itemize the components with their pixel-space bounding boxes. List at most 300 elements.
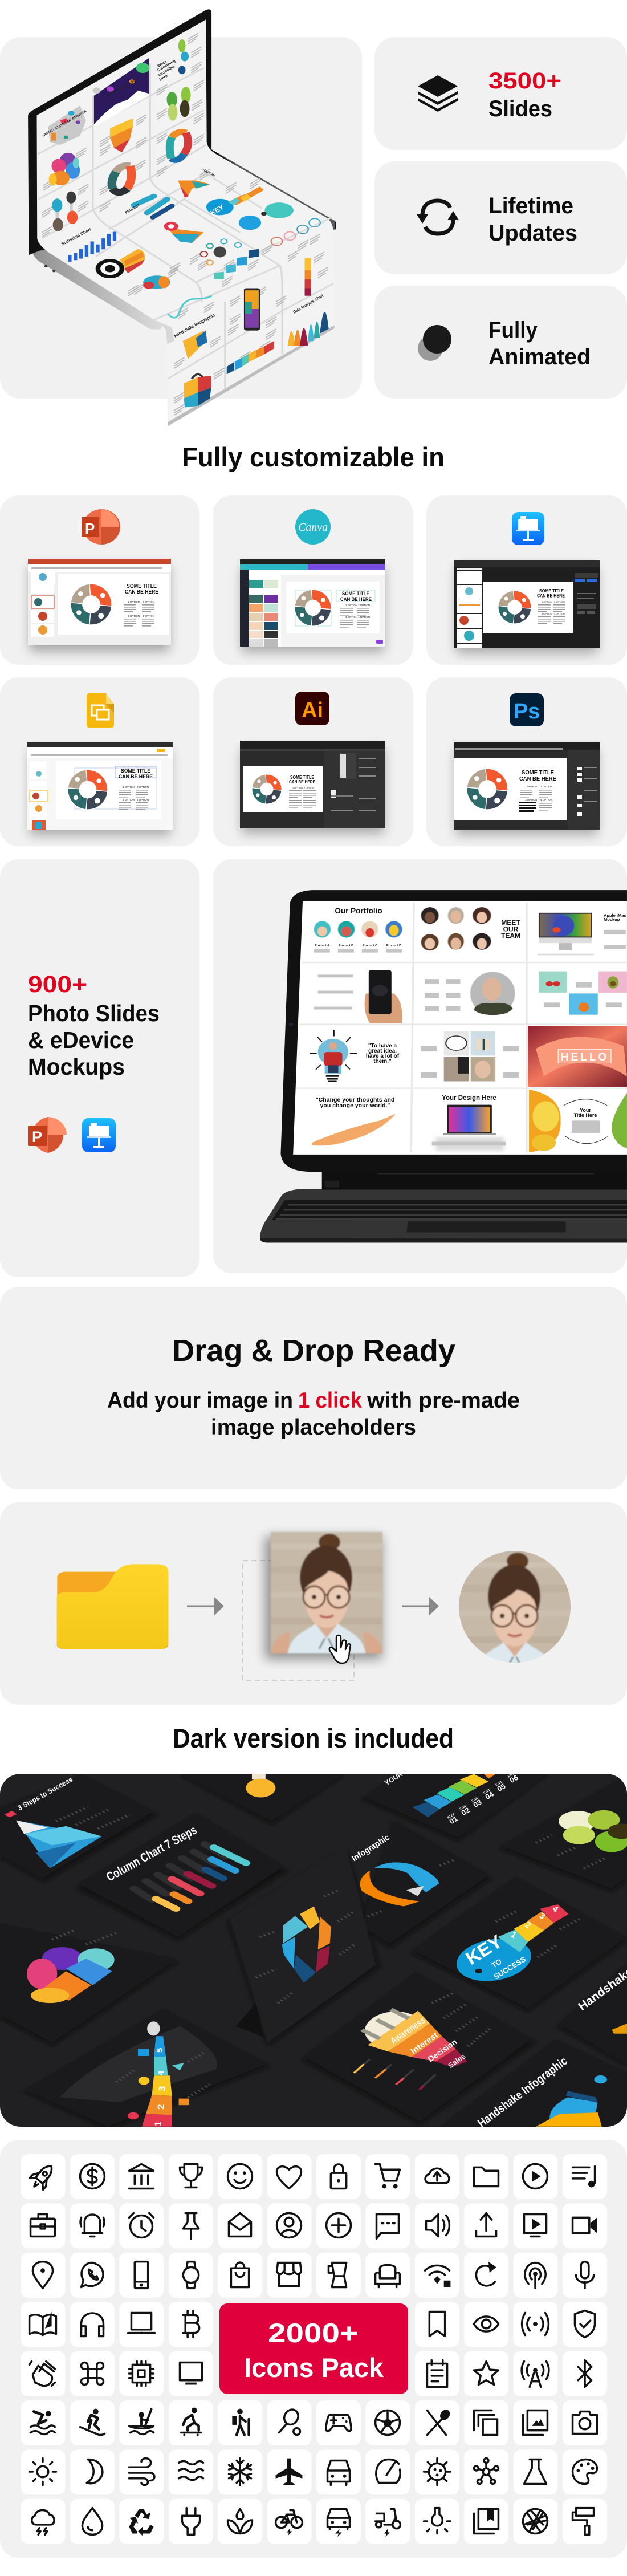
dark slide headings: 5 (155, 2048, 165, 2053)
panel: tablet mockup (213, 859, 627, 1273)
icon: waves (179, 2461, 203, 2480)
icon: camera (573, 2412, 597, 2433)
lightbulb circle (246, 1774, 275, 1797)
tablet slide texts: TEAM (501, 932, 520, 940)
network head (200, 239, 241, 265)
icon: command (81, 2363, 104, 2384)
icon: store (277, 2263, 301, 2286)
screenshot: Canva window: 1 OPTION (345, 604, 357, 607)
icon: armchair (376, 2265, 400, 2287)
icon: lock (331, 2164, 347, 2188)
blue column chart (68, 232, 116, 262)
callout: 2000+ icons pack: Icons Pack (244, 2352, 384, 2383)
icon: Keynote (82, 1118, 116, 1152)
triangle pyramid (4, 1811, 102, 1868)
card: lifetime updates (374, 161, 627, 274)
panel: dark version slides (0, 1766, 627, 2130)
screenshot: Keynote window: 3 OPTION (542, 612, 552, 615)
icon: cloud upload (425, 2168, 449, 2183)
screenshot: Illustrator window (240, 741, 385, 834)
dark slide headings: Sales (446, 2052, 467, 2070)
screenshot: Photoshop window: CAN BE HERE (519, 776, 556, 782)
text: Lifetime Updates: Lifetime (488, 193, 573, 218)
text: add your image: image placeholders (211, 1415, 416, 1440)
screenshot: Canva window: 3 OPTION (345, 616, 357, 619)
dark slide headings: STEP (459, 1804, 467, 1811)
icon: water drop (82, 2508, 103, 2534)
arrow (187, 1597, 224, 1615)
screenshot: Keynote window: 1 OPTION (542, 600, 552, 603)
icon: Photoshop: Ps (514, 700, 540, 724)
screenshot: Illustrator window: 1 OPTION (292, 787, 303, 789)
icon: skateboarder (181, 2408, 201, 2436)
screenshot: PowerPoint window (28, 559, 171, 651)
screenshot: PowerPoint window: 3 OPTION (128, 615, 140, 617)
card: Canva (213, 495, 413, 665)
screenshot: Google Slides window: SOME TITLE (121, 768, 150, 774)
heading: fully customizable in: Fully customizable in (182, 442, 445, 472)
icon: animated dot (418, 325, 451, 361)
icon: aperture (523, 2509, 547, 2533)
tablet slide texts: Our Portfolio (335, 907, 382, 915)
screenshot: PowerPoint window: CAN BE HERE (125, 589, 158, 595)
dark slide headings: STEP (483, 1788, 491, 1795)
tablet with keyboard illustration (260, 890, 627, 1243)
screenshot: Photoshop window (454, 742, 600, 835)
dark slide headings: Handshake Infographic (475, 2054, 570, 2130)
icon: skier (80, 2409, 104, 2435)
iMac mockup (538, 913, 594, 955)
icon: monitor (180, 2363, 202, 2384)
icon: headphones (81, 2313, 104, 2336)
icon: network (474, 2459, 498, 2484)
text: Lifetime Updates (488, 193, 577, 246)
slide heading texts on sheet: Statistical Chart (60, 226, 92, 247)
icon: lotus (228, 2509, 252, 2533)
icon: bell (80, 2215, 104, 2236)
arrow (402, 1597, 439, 1615)
screenshot: Keynote window (454, 560, 600, 653)
text: 3500+ Slides: 3500+ (488, 68, 561, 94)
dark slide headings: STEP (495, 1780, 503, 1787)
icon: images (523, 2411, 547, 2435)
tablet slide texts (315, 907, 626, 1118)
slide heading texts on sheet: UNITED STATES OF AMERICA (42, 109, 88, 138)
heading: drag and drop: Drag & Drop Ready (172, 1334, 455, 1368)
icon: wifi lock (425, 2265, 450, 2287)
icon: user circle (277, 2213, 301, 2237)
card: Keynote (426, 495, 627, 665)
icon: map pin (32, 2262, 53, 2288)
dark slide headings: 3 (538, 1911, 547, 1921)
data analysis chart (288, 312, 329, 346)
rocket road (142, 2021, 172, 2127)
dark ring (112, 166, 132, 192)
icon: electric bike (276, 2510, 302, 2536)
icon: podcast (525, 2263, 545, 2288)
icon: light bulb (424, 2508, 450, 2533)
dark slide headings: 06 (508, 1773, 520, 1785)
US map slide (48, 105, 86, 145)
text: 900+ Photo Slides & eDevice Mockups: Mockups (28, 1054, 125, 1080)
laptop mockup (436, 1105, 504, 1151)
head infographic (360, 1862, 439, 1907)
brain infographic (143, 275, 170, 289)
icon: copy (474, 2411, 497, 2435)
tablet slide texts: Your Design Here (442, 1095, 496, 1102)
icon: speaker (426, 2215, 449, 2236)
card: 900+ photo slides (0, 859, 199, 1277)
vertical tag column (305, 258, 311, 296)
progress circles (271, 218, 320, 246)
panel: icons pack (0, 2140, 627, 2558)
tablet slide texts: "Change your thoughts and (316, 1096, 394, 1103)
card: drag and drop ready (0, 1287, 627, 1489)
handshake infographic (183, 331, 207, 359)
text: Fully Animated (488, 318, 591, 369)
icon: electric car (327, 2509, 350, 2537)
icon: trophy (180, 2164, 202, 2187)
phone in hand (365, 970, 402, 1023)
screenshot: PowerPoint window: 2 OPTION (142, 600, 154, 603)
tablet slide texts: have a lot of (366, 1053, 400, 1059)
icon: folder (57, 1564, 168, 1649)
icon: bank (129, 2164, 153, 2188)
screenshot: Google Slides window: CAN BE HERE (119, 774, 153, 780)
image placeholders (444, 1031, 495, 1081)
card: fully animated (374, 286, 627, 399)
dark slide headings: 2 (523, 1920, 532, 1931)
icon: PowerPoint (82, 509, 120, 545)
icon: storm cloud (32, 2510, 54, 2534)
icon: layers (418, 75, 458, 112)
card: 3500+ slides (374, 37, 627, 150)
dark slide headings: 02 (459, 1806, 471, 1817)
fruit tiles (539, 972, 627, 1015)
dark slide headings: 2 (156, 2104, 166, 2110)
icon: PowerPoint: P (32, 1128, 42, 1145)
photo being dragged (265, 1532, 382, 1659)
slide heading texts on sheet: Data Analysis Chart (292, 293, 324, 315)
icon: heart (277, 2167, 301, 2188)
screenshot: PowerPoint window: 1 OPTION (128, 600, 140, 603)
screenshot: PowerPoint window: 4 OPTION (142, 615, 154, 617)
screenshot: Canva window: 2 OPTION (358, 604, 370, 607)
icon: open envelope (229, 2213, 251, 2236)
fruit slide (529, 1090, 627, 1152)
icon: Canva (295, 509, 331, 545)
tablet slide texts: you change your world." (320, 1102, 390, 1109)
icon: bookmarks (474, 2509, 498, 2533)
icon: bitcoin (183, 2311, 199, 2337)
heads infographic (239, 202, 294, 230)
key infographic (206, 186, 264, 215)
text: add your image: 1 click (298, 1388, 362, 1413)
clover petals (559, 1810, 627, 1852)
funnel infographic (353, 2004, 467, 2090)
slide shadows (0, 1774, 627, 2130)
icon: kayak (129, 2410, 153, 2434)
dark slide headings: 4 (551, 1904, 560, 1915)
text: 3500+ Slides: Slides (488, 96, 552, 121)
screenshot: Google Slides window: 4 OPTION (137, 798, 149, 801)
icon: wind (129, 2459, 154, 2485)
icon: bookmark (429, 2312, 445, 2336)
icon: laptop (128, 2313, 154, 2334)
icon: hand cursor (329, 1635, 351, 1663)
handshake hands (536, 2024, 627, 2127)
icon: virus (424, 2459, 450, 2485)
icon: antenna (522, 2362, 549, 2387)
tablet slide texts: Product B (339, 944, 353, 948)
callout: 2000+ icons pack (219, 2303, 408, 2394)
icon: PowerPoint: P (85, 520, 95, 537)
panel: hero with laptop (0, 9, 362, 426)
screenshot: Keynote window: 4 OPTION (554, 612, 565, 615)
screenshot: Photoshop window: 1 OPTION (525, 785, 537, 788)
icon: broadcast (522, 2313, 548, 2335)
screenshot: Illustrator window: SOME TITLE (290, 775, 315, 780)
icon: moon (87, 2460, 103, 2484)
screenshot: Google Slides window: 2 OPTION (137, 786, 149, 789)
icon: shield check (575, 2311, 595, 2337)
icon: refresh (476, 2262, 496, 2286)
dark slide headings: YOUR A (383, 1766, 410, 1787)
tablet slide texts: HELLO (561, 1051, 609, 1063)
icon: blender (328, 2263, 347, 2287)
dashed placeholder (243, 1561, 354, 1680)
icon: screen play (524, 2215, 546, 2236)
text: add your image (107, 1388, 520, 1440)
tablet slide texts: Product C (363, 944, 377, 948)
screenshot: Canva window: CAN BE HERE (340, 596, 372, 603)
text: 900+ Photo Slides & eDevice Mockups: Photo Slides (28, 1000, 160, 1026)
icon: briefcase (31, 2215, 55, 2236)
tablet slide texts: great idea, (368, 1048, 397, 1054)
wavy timeline (168, 296, 212, 318)
icon: chip (129, 2362, 153, 2386)
icon: Illustrator: Ai (302, 698, 323, 722)
screenshot: Photoshop window: 3 OPTION (525, 798, 537, 801)
icon: car (327, 2461, 350, 2485)
slide heading texts on sheet: Incredible (157, 64, 176, 78)
dark slide headings: STEP (471, 1796, 479, 1803)
icon: sun (30, 2459, 56, 2485)
icon: paint roller (573, 2508, 594, 2534)
tablet slide texts: OUR (503, 925, 519, 933)
icon: chat (376, 2215, 399, 2238)
numbered tags (214, 249, 259, 279)
portfolio portraits (314, 921, 402, 937)
icon: gauge (376, 2460, 400, 2482)
funnel infographic (110, 118, 133, 152)
text: 900+ Photo Slides & eDevice Mockups: 900+ (28, 971, 87, 997)
icon: plus circle (327, 2213, 351, 2237)
icon: Google Slides (87, 693, 114, 728)
text: add your image: Add your image in (107, 1388, 293, 1413)
slide heading texts on sheet: 5 STEPS TO SUCCESS (107, 78, 138, 98)
icon: Canva: Canva (298, 521, 328, 534)
hexagon ring infographic (282, 1907, 331, 1982)
icon: tennis racket (279, 2407, 301, 2435)
icon: book (30, 2312, 56, 2335)
screenshot: Photoshop window: 2 OPTION (540, 785, 552, 788)
A shape and capsules (134, 181, 210, 217)
column chart bars (134, 1844, 246, 1909)
dark slide headings (16, 1766, 627, 2130)
dark slide headings: SUCCESS (492, 1955, 527, 1981)
text: Lifetime Updates: Updates (488, 221, 577, 246)
slide heading texts on sheet: YOU CAN (201, 168, 215, 178)
screenshot: Photoshop window: SOME TITLE (522, 770, 554, 776)
slide heading texts on sheet (42, 59, 324, 339)
icon: phone (135, 2262, 148, 2288)
dark slide headings: 05 (496, 1782, 507, 1793)
card: Google Slides (0, 677, 199, 846)
hello image (528, 1026, 627, 1087)
icon: flask (524, 2460, 546, 2484)
dark slide headings: 3 (157, 2086, 168, 2091)
screenshot: Canva window (240, 559, 385, 652)
screenshot: Canva window: SOME TITLE (342, 591, 369, 597)
dark slide headings: TO (490, 1957, 503, 1970)
timeline strip (227, 341, 274, 374)
icon: whatsapp (81, 2262, 103, 2287)
pyramid infographic (164, 222, 204, 243)
portrait of man (470, 972, 515, 1015)
tablet slide texts: Your (580, 1107, 591, 1113)
brush stroke (312, 1114, 396, 1145)
icon: star (474, 2362, 498, 2384)
pin markers (178, 39, 189, 74)
screenshot: Illustrator window: CAN BE HERE (289, 779, 316, 785)
team portraits (421, 907, 491, 950)
dark slide headings: 4 (156, 2070, 166, 2075)
tablet slide texts: "To have a (368, 1043, 397, 1049)
slide heading texts on sheet: Something (156, 59, 176, 73)
dark slide headings: 04 (483, 1790, 495, 1801)
tablet slide texts: Title Here (574, 1112, 597, 1118)
slide heading texts on sheet: Write (157, 60, 168, 68)
quote bulb (310, 1030, 357, 1082)
small text blocks on slides (42, 33, 328, 415)
steps ribbon (413, 1774, 496, 1817)
small icons around road (128, 2049, 189, 2119)
icon: palette (573, 2460, 597, 2484)
text: 900+ Photo Slides & eDevice Mockups (28, 971, 160, 1080)
space rocket slide (93, 58, 149, 127)
target infographic (96, 249, 145, 278)
icon: swimmer (31, 2411, 55, 2434)
slide heading texts on sheet: PROJECT (125, 204, 141, 215)
screenshot: PowerPoint window: SOME TITLE (127, 583, 157, 590)
icon: Keynote (512, 512, 544, 545)
dark slide headings: 03 (472, 1798, 483, 1809)
screenshot: Keynote window: 2 OPTION (554, 600, 565, 603)
icon: plug (182, 2508, 200, 2534)
panel: drag and drop steps (0, 1502, 627, 1705)
tablet slide texts: Product D (386, 944, 401, 948)
card: Illustrator (213, 677, 413, 846)
text: Fully Animated: Animated (488, 344, 591, 369)
key to success (456, 1904, 569, 1981)
icon: smile (228, 2164, 252, 2188)
dark slide headings: STEP (447, 1813, 455, 1820)
icon: cutlery (427, 2408, 452, 2435)
dark slide headings: Column Chart 7 Steps (104, 1823, 199, 1884)
clover infographic (167, 87, 191, 121)
icon: dollar (80, 2164, 104, 2188)
ring infographic (170, 132, 188, 160)
icon: watch (183, 2262, 199, 2288)
dark slide headings: Infographic (350, 1833, 392, 1863)
icon: refresh arrows (417, 201, 459, 234)
screenshot: Illustrator window: 2 OPTION (304, 787, 314, 789)
icon: music list (573, 2166, 595, 2187)
standing tablet slide (230, 1845, 376, 2042)
tablet slide texts: MEET (501, 919, 520, 927)
screenshot: Keynote window: CAN BE HERE (537, 593, 565, 599)
tablet slide texts: Mockup (604, 917, 620, 922)
icon: alarm clock (129, 2213, 153, 2237)
dark slide headings: 1 (153, 2122, 164, 2127)
foldable laptop illustration (28, 9, 336, 426)
icon: airplane (276, 2459, 302, 2485)
phone infographic (244, 288, 260, 331)
icon: cart (376, 2164, 400, 2188)
tablet slide texts: Apple iMac (604, 913, 626, 918)
icon: video camera (573, 2217, 597, 2233)
text: 3500+ Slides (488, 68, 561, 121)
dark slide headings: 3 Steps to Success (16, 1775, 74, 1813)
icon: calendar (427, 2360, 447, 2387)
icon: soccer ball (376, 2411, 400, 2435)
icon: clapping hands (30, 2362, 55, 2386)
icon: microphone (576, 2262, 594, 2288)
card: Photoshop (426, 677, 627, 846)
icon: game controller (326, 2415, 351, 2431)
icon: shopping bag (231, 2262, 249, 2287)
icon: hiker (232, 2409, 249, 2435)
dark slide headings: Interest (409, 2030, 440, 2056)
dark slide headings: 01 (448, 1814, 459, 1826)
icon: recycle (129, 2509, 153, 2536)
callout: 2000+ icons pack: 2000+ (268, 2318, 359, 2348)
icon: rocket (27, 2160, 58, 2192)
screenshot: Canva window: 4 OPTION (358, 616, 370, 619)
dark slide headings: 1 (509, 1929, 518, 1940)
screenshot: Google Slides window: 3 OPTION (123, 798, 135, 801)
dark slide headings: STEP (507, 1771, 516, 1779)
heading: dark version: Dark version is included (173, 1723, 454, 1753)
icon: folder (474, 2167, 498, 2187)
icon: electric scooter (376, 2509, 400, 2537)
dark slide headings: Awareness (388, 2015, 427, 2046)
icon: upload (476, 2213, 496, 2236)
cropped circular photo (459, 1551, 571, 1672)
icon: snowflake (229, 2459, 251, 2485)
screenshot: Google Slides window (27, 742, 173, 835)
screenshot: Keynote window: SOME TITLE (539, 588, 564, 594)
screenshot: Photoshop window: 4 OPTION (540, 798, 552, 801)
SWOT infographic (52, 192, 78, 231)
icon: Illustrator (295, 692, 329, 725)
text: Fully Animated: Fully (488, 318, 538, 343)
card: PowerPoint (0, 495, 199, 665)
puzzle cloud (49, 153, 80, 186)
dark slide headings: Decision (426, 2037, 459, 2063)
slide panels (0, 1774, 627, 2127)
